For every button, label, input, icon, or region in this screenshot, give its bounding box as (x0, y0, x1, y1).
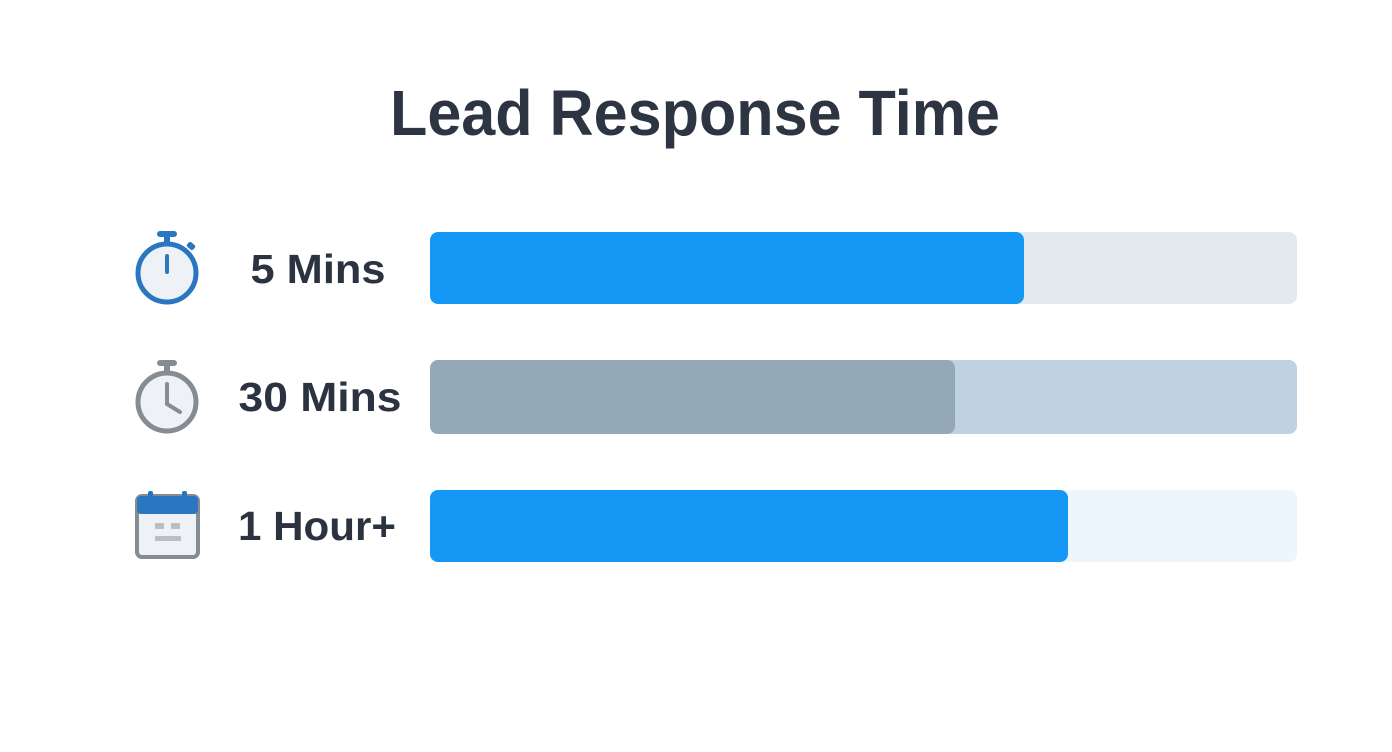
label: 5 Mins: 5 Mins (250, 246, 386, 292)
row: 30 mins (138, 360, 1297, 434)
row: 1 hour+ (137, 490, 1297, 562)
icon: stopwatch grey (138, 360, 196, 431)
icon: stopwatch blue (138, 231, 196, 302)
icon: calendar (137, 491, 198, 557)
bar: 1 hour+ (430, 490, 1297, 562)
bar: 5 mins (430, 232, 1297, 304)
label: 30 Mins: 30 Mins (238, 374, 402, 420)
title: Lead Response Time (390, 77, 1000, 149)
bar: 30 mins (430, 360, 1297, 434)
row: 5 mins (138, 231, 1297, 304)
label: 1 Hour+: 1 Hour+ (238, 503, 396, 549)
